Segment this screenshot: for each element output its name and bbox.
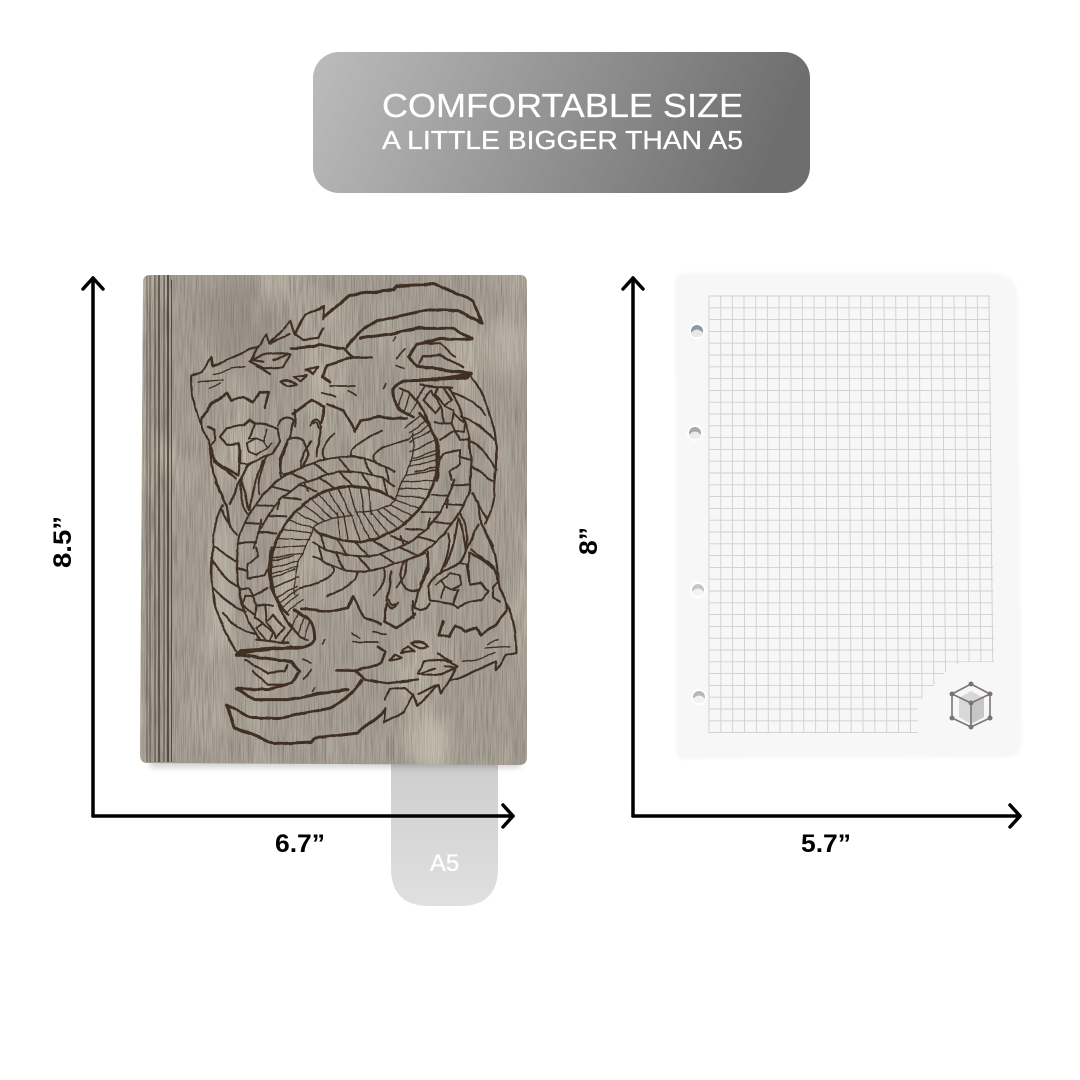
height axis: book: [83, 278, 513, 827]
book spine layers: [147, 275, 172, 762]
A5 label: A5: [430, 850, 459, 877]
sub-part: jaw, teeth and belly plates: [201, 410, 322, 527]
header banner: [313, 52, 810, 193]
height axis: paper: [623, 278, 1020, 827]
A5 size comparison tab: [391, 760, 498, 906]
label: paper height: 8”: [575, 527, 603, 555]
engraved dragon artwork: [192, 284, 516, 744]
icon: cube logo: [950, 682, 992, 730]
squared grid: [709, 296, 995, 733]
width axis: paper: [633, 805, 1020, 827]
wooden notebook cover: [138, 273, 530, 775]
label: book height: 8.5”: [49, 516, 77, 568]
label: paper width: 5.7”: [801, 830, 851, 858]
label: book width: 6.7”: [275, 830, 325, 858]
refill paper sheet: [677, 275, 1020, 757]
heading: comfortable size: COMFORTABLE SIZE: [382, 87, 743, 124]
width axis: book: [93, 805, 513, 827]
infographic canvas: [53, 52, 1022, 906]
sub-part: neck scales and horn plates: [393, 373, 497, 481]
subheading: a little bigger than A5: A LITTLE BIGGER THAN A5: [382, 125, 743, 155]
punched holes: [687, 323, 707, 705]
